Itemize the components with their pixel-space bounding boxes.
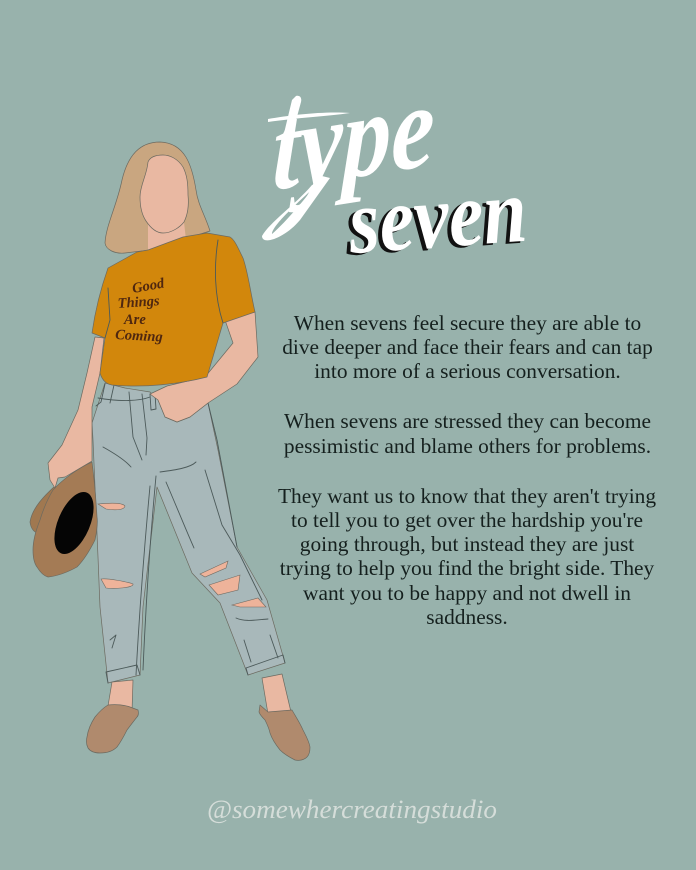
text: what they want us to know: saddness. — [426, 605, 508, 629]
right arm and hand — [150, 312, 258, 422]
text: what they want us to know: to tell you to get over the hardship you're — [291, 508, 643, 532]
title: seven — [340, 159, 530, 275]
t-shirt — [92, 233, 255, 386]
seven shadow: seven — [340, 161, 526, 275]
hat brim — [33, 462, 97, 577]
seven face: seven — [344, 159, 530, 273]
credit handle: @somewhercreatingstudio — [207, 795, 497, 824]
title: type: type — [272, 59, 436, 217]
text: what they want us to know — [278, 484, 656, 629]
text: when secure: into more of a serious conversation. — [314, 359, 621, 383]
neck — [148, 222, 186, 252]
text: when secure — [282, 311, 653, 383]
left ankle — [108, 680, 133, 712]
right shoe — [259, 705, 310, 760]
left shoe — [86, 705, 138, 753]
title swash: t stem, crossbar and descender loop — [262, 96, 350, 240]
text: when stressed: When sevens are stressed they can become — [284, 409, 651, 433]
hair — [105, 142, 210, 253]
hat opening — [46, 486, 102, 560]
shirt lettering: Things — [117, 293, 160, 312]
left arm and hand — [48, 337, 104, 488]
face — [140, 155, 188, 233]
shirt lettering: Are — [123, 312, 146, 328]
text: when stressed: pessimistic and blame others for problems. — [284, 434, 651, 458]
right ankle — [262, 674, 291, 714]
shirt lettering: Coming — [115, 327, 163, 345]
text: what they want us to know: want you to be happy and not dwell in — [303, 581, 631, 605]
text: when secure: dive deeper and face their fears and can tap — [282, 335, 653, 359]
jeans rips — [98, 503, 266, 607]
text: when secure: When sevens feel secure they are able to — [294, 311, 641, 335]
hat crown back — [30, 486, 70, 534]
text: what they want us to know: going through, but instead they are just — [300, 532, 634, 556]
sleeve seams — [105, 240, 223, 338]
shirt lettering: Good — [131, 275, 166, 297]
text: what they want us to know: trying to help you find the bright side. They — [280, 556, 655, 580]
shirt lettering — [115, 275, 166, 345]
jeans — [92, 383, 285, 683]
text: what they want us to know: They want us to know that they aren't trying — [278, 484, 656, 508]
illustration: woman holding a hat — [30, 142, 310, 760]
text: when stressed — [284, 409, 651, 458]
jeans details — [96, 384, 285, 683]
